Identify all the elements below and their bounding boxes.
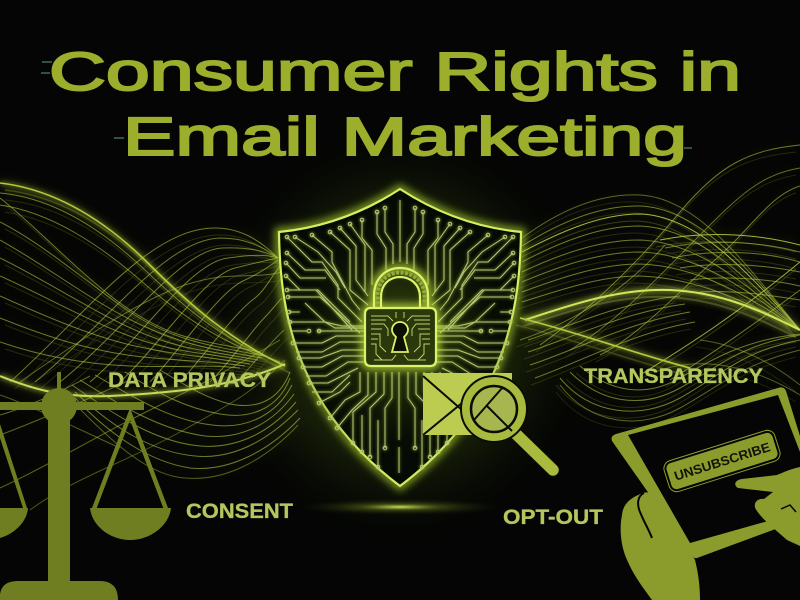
right hand <box>735 467 800 546</box>
right light waves <box>520 145 800 421</box>
floor glow <box>290 498 510 516</box>
left wave extra strands <box>5 190 290 389</box>
circuit traces <box>284 200 516 473</box>
icon: scales of justice <box>0 372 171 600</box>
padlock <box>365 268 436 366</box>
right wave soft glow <box>520 145 800 421</box>
unsubscribe button: UNSUBSCRIBE <box>672 439 772 484</box>
icon: tablet with unsubscribe button and hands <box>612 387 800 600</box>
label: transparency: TRANSPARENCY <box>584 365 763 388</box>
keyhole <box>392 322 408 352</box>
title: Email Marketing <box>123 107 687 167</box>
lock circuit <box>371 312 430 360</box>
title: Consumer Rights in <box>49 42 741 102</box>
icon: email envelope with magnifying glass <box>423 373 553 470</box>
label: consent: CONSENT <box>186 500 293 523</box>
lower left light waves <box>0 340 300 510</box>
shield with circuit pattern <box>279 189 521 486</box>
label: opt-out: OPT-OUT <box>503 506 603 529</box>
title <box>41 42 741 167</box>
left wave soft glow <box>0 183 285 382</box>
background glow <box>200 120 600 550</box>
right wave extra strands <box>516 152 796 428</box>
lower left wave soft glow <box>0 340 300 510</box>
label: data privacy: DATA PRIVACY <box>108 369 271 392</box>
unsubscribe button <box>662 428 782 494</box>
left hand <box>621 492 700 600</box>
left light waves <box>0 183 285 382</box>
